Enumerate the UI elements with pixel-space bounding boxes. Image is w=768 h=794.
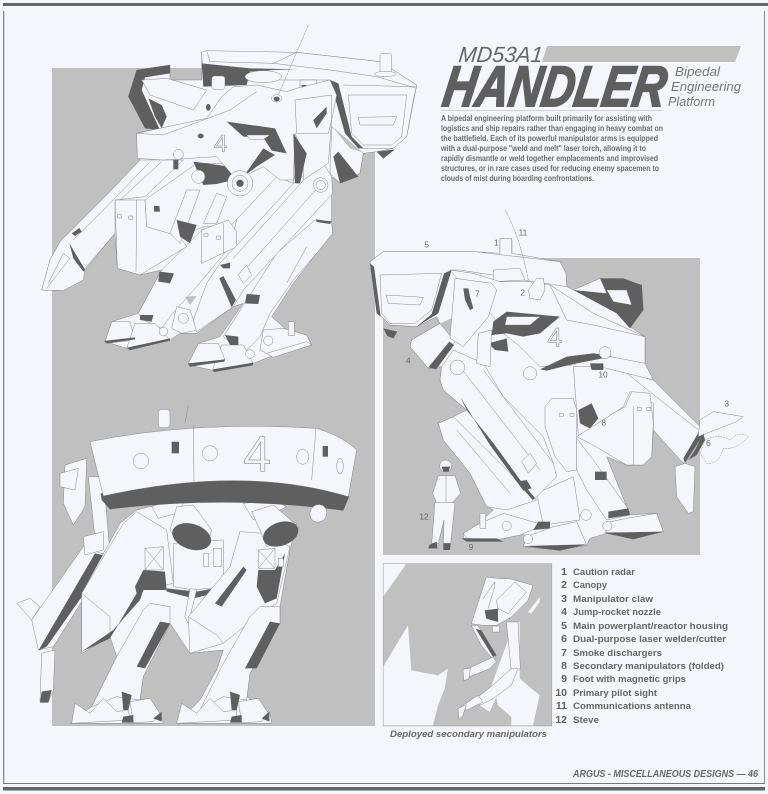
illustration: three-quarter view of the Handler [42,25,417,372]
divider rule [441,110,663,111]
description text: logistics and ship repairs rather than engaging in heavy combat on [441,124,663,133]
title bar [542,46,741,62]
legend: 10 [555,687,567,699]
rear legs [223,220,333,353]
legs [92,603,170,707]
illustration: side view of the Handler with callouts [370,210,748,552]
caption: Deployed secondary manipulators [390,729,547,740]
legend: Secondary manipulators (folded) [573,661,724,672]
callout numbers: 11 [519,228,528,238]
legend: Main powerplant/reactor housing [573,621,728,632]
legend: Manipulator claw [573,594,654,605]
legend: Jump-rocket nozzle [573,607,661,618]
callout numbers: 4 [406,355,411,365]
left manipulator arm [42,160,183,291]
left arm [63,458,87,525]
subtitle: Engineering [671,79,742,94]
hull [450,270,645,367]
center box [173,540,223,590]
underside nozzles [152,500,183,518]
legend: Communications antenna [573,701,692,712]
hull band [101,480,349,511]
legend: 12 [555,714,567,726]
callout numbers [406,228,729,552]
right body [188,532,290,653]
legend: 6 [561,633,567,645]
far arm [573,367,705,463]
model designation: MD53A1 [457,42,544,67]
callout numbers: 1 [494,237,499,247]
description text [440,114,663,183]
title block [439,42,742,119]
near arm [440,350,557,498]
callout numbers: 3 [724,399,729,409]
subtitle [668,64,742,109]
callout numbers: 9 [469,542,474,552]
legend: Canopy [573,580,608,591]
figure: torso [471,577,533,625]
legend: Caution radar [573,567,635,578]
illustration: three-quarter view of the Handler: 4 [214,131,227,158]
description text: with a dual-purpose "weld and melt" laser torch, allowing it to [440,144,646,153]
legend: Steve [573,715,599,726]
callout numbers: 5 [424,240,429,250]
panel: grey backdrop left [52,68,375,726]
legend: 2 [561,579,567,591]
callout numbers: 8 [601,417,606,427]
name: HANDLER [439,55,671,119]
legend: 11 [556,700,567,712]
legs [577,438,630,520]
claw [698,412,743,437]
callout numbers: 7 [475,289,480,299]
figure: left manipulator [471,625,496,659]
legend: 5 [561,620,567,632]
callout numbers: 12 [419,512,429,522]
panel: deployed secondary manipulators [383,564,552,726]
legend: Foot with magnetic grips [573,674,686,685]
callout numbers: 6 [706,438,711,448]
legend: Dual-purpose laser welder/cutter [573,634,726,645]
illustration: front view of the Handler [17,405,357,723]
description text: A bipedal engineering platform built primarily for assisting with [441,114,652,123]
legend: 1 [561,566,567,578]
left body [82,512,173,653]
dark handle [573,278,643,328]
description text: clouds of mist during boarding confrontations. [441,174,594,183]
legend: 4 [561,606,567,618]
description text: the battlefield. Each of its powerful manipulator arms is equipped [441,134,658,143]
description text: structures, or in rare cases used for reducing enemy spacemen to [441,164,659,173]
subtitle: Platform [668,94,715,109]
legend: 7 [561,647,567,659]
description text: rapidly dismantle or weld together emplacements and improvised [441,154,658,163]
callout numbers: 2 [520,288,525,298]
illustration: front view of the Handler: 4 [243,427,271,483]
legend: 9 [561,673,567,685]
panel: grey backdrop right [383,258,700,555]
figure: Steve [428,460,461,550]
main hull [137,80,337,180]
figure: right manipulator [506,622,520,670]
legend: Smoke dischargers [573,648,662,659]
legend: 3 [561,593,567,605]
body blocks [145,163,297,237]
rear nozzle [440,318,455,342]
body silhouette [70,500,297,723]
illustration: side view of the Handler with callouts: 4 [547,323,562,353]
near body [545,398,577,472]
legend [555,566,728,726]
legend: Primary pilot sight [573,688,658,699]
subtitle: Bipedal [675,64,721,79]
right manipulator arm [193,163,333,332]
dark rear handle [128,65,170,130]
legend: 8 [561,660,567,672]
callout numbers: 10 [598,370,608,380]
